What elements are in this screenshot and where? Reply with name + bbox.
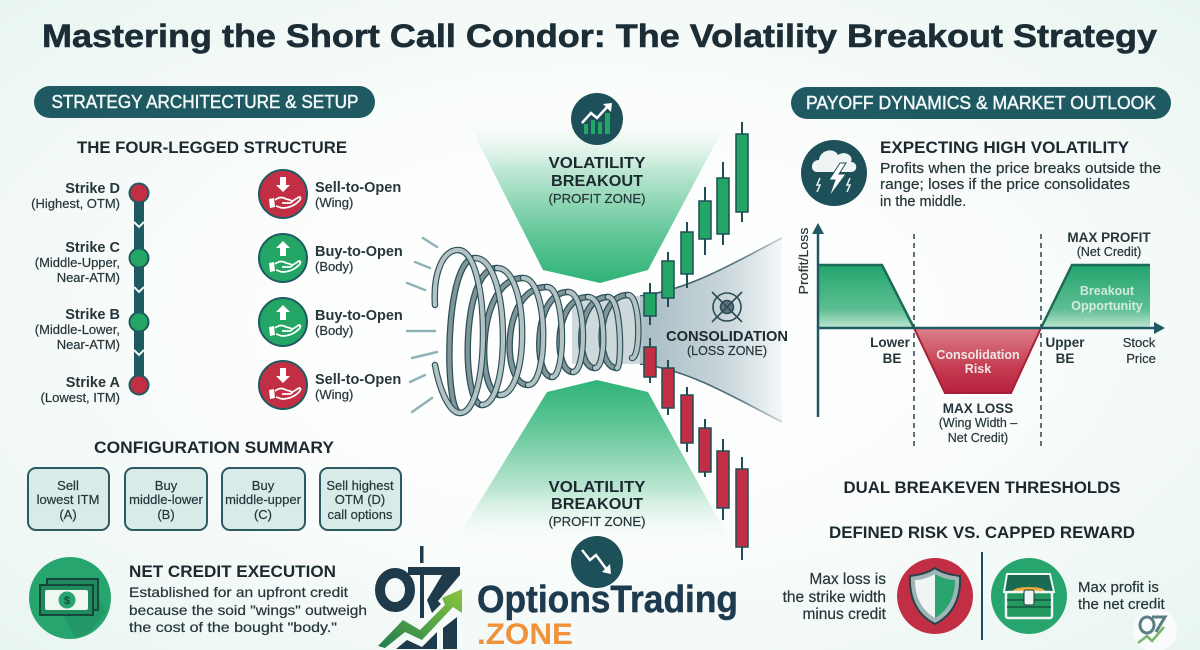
leg labels: (Body) [315,259,353,274]
net credit text: the cost of the bought "body." [129,619,337,635]
icon: buy body B [259,298,307,346]
upper profit funnel [462,110,733,283]
upper breakout label: VOLATILITY [548,155,646,172]
heading: configuration summary: CONFIGURATION SUMMARY [94,438,335,457]
strike labels: (Middle-Lower, [35,322,120,337]
icon: sell wing A [259,361,307,409]
max profit text [1078,579,1166,613]
max profit text: the net credit [1078,596,1166,613]
lower breakout label: (PROFIT ZONE) [548,514,646,529]
payoff chart: Profit/Loss [796,227,811,294]
payoff chart: MAX PROFIT [1067,230,1151,245]
brand logo [378,546,738,650]
volatility text: in the middle. [880,194,966,210]
heading: defined risk: DEFINED RISK VS. CAPPED REWARD [829,524,1135,542]
leg labels: (Wing) [315,195,353,210]
summary box C: (C) [254,507,272,522]
max loss text: the strike width [783,589,886,606]
payoff chart: Risk [965,362,991,376]
green candlesticks [644,122,748,325]
payoff chart: Opportunity [1071,299,1143,313]
watermark logo [1133,608,1177,650]
icon: money: $ [64,595,70,607]
max loss text [783,571,887,623]
heading: dual breakeven: DUAL BREAKEVEN THRESHOLDS [844,479,1120,497]
icon: rising chart [571,93,623,145]
payoff chart: Consolidation [936,348,1020,362]
consolidation loss zone [572,238,782,422]
strike labels: Near-ATM) [57,270,120,285]
icon: consolidation target [712,292,742,322]
net credit text: NET CREDIT EXECUTION [129,562,336,581]
payoff chart: Upper [1045,335,1085,350]
max profit text: Max profit is [1078,579,1159,596]
upper breakout label: (PROFIT ZONE) [548,191,646,206]
strike labels: (Lowest, ITM) [41,390,120,405]
summary box D: call options [327,507,393,522]
summary box A: lowest ITM [37,492,99,507]
consolidation label [666,328,788,358]
leg labels: Sell-to-Open [315,180,401,196]
section heading: payoff dynamics [791,87,1171,119]
icon: treasure chest [991,558,1067,634]
summary box A: (A) [59,507,77,522]
leg labels: (Body) [315,323,353,338]
volatility text: EXPECTING HIGH VOLATILITY [880,138,1130,157]
net credit text: because the soid "wings" outweigh [129,602,367,618]
summary box B: Buy [155,478,178,493]
lower breakout label: VOLATILITY [548,479,646,496]
section heading: strategy architecture [34,86,375,118]
summary box B: middle-lower [129,492,204,507]
payoff chart: Stock [1123,335,1156,350]
leg labels [315,180,403,402]
logo mark [378,546,462,649]
logo wordmark: OptionsTrading [477,579,738,621]
strike labels: Strike B [65,307,120,323]
summary box B: (B) [157,507,175,522]
payoff chart: MAX LOSS [943,401,1013,416]
lower breakout label [548,479,646,529]
payoff chart: Net Credit) [948,431,1008,445]
icon: storm cloud [801,140,867,206]
panel: central volatility diagram [407,93,788,588]
consolidation label: (LOSS ZONE) [687,343,767,358]
summary box A: Sell [57,478,79,493]
upper breakout label [548,155,646,206]
strike labels: Near-ATM) [57,337,120,352]
payoff chart: Lower [870,335,911,350]
summary box A [28,468,109,530]
leg labels: Buy-to-Open [315,308,403,324]
summary box B [125,468,207,530]
net credit text [129,562,367,635]
payoff chart: Price [1126,351,1156,366]
red candlesticks [644,338,748,560]
upper breakout label: BREAKOUT [551,173,643,190]
icon: falling chart [571,536,623,588]
payoff chart: BE [883,351,901,366]
summary box D: Sell highest [326,478,394,493]
icon: buy body C [259,234,307,282]
consolidation label: CONSOLIDATION [666,328,788,345]
icon: sell wing D [259,170,307,218]
lower breakout label: BREAKOUT [551,496,643,513]
strike labels: Strike C [65,240,121,256]
summary box D: OTM (D) [335,492,385,507]
strike ladder [130,184,148,394]
strike labels [31,181,121,405]
strike labels: (Middle-Upper, [35,255,120,270]
summary box C [222,468,305,530]
volatility text: range; loses if the price consolidates [880,177,1130,193]
section heading: strategy architecture: STRATEGY ARCHITECTURE & SETUP [52,92,358,112]
spring motion lines [407,238,437,412]
volatility text: Profits when the price breaks outside the [880,161,1161,177]
summary box C: Buy [252,478,275,493]
title: Mastering the Short Call Condor: The Volatility Breakout Strategy [42,18,1157,54]
leg labels: (Wing) [315,387,353,402]
payoff chart: BE [1056,351,1074,366]
max loss text: Max loss is [809,571,886,588]
divider [981,552,983,640]
panel: strategy architecture and setup [28,86,403,639]
summary box C: middle-upper [225,492,302,507]
payoff chart [796,223,1165,447]
strike labels: Strike A [66,375,121,391]
leg labels: Sell-to-Open [315,372,401,388]
volatility text [880,138,1161,210]
summary box D [320,468,401,530]
payoff chart: (Net Credit) [1077,245,1141,259]
strike labels: (Highest, OTM) [31,196,120,211]
lower profit funnel [450,380,735,550]
icon: shield [897,558,973,634]
max loss text: minus credit [802,606,887,623]
icon: money [29,557,111,639]
section heading: payoff dynamics: PAYOFF DYNAMICS & MARKET OUTLOOK [806,93,1156,113]
payoff chart: (Wing Width – [939,416,1017,430]
payoff chart: Breakout [1080,284,1135,298]
leg labels: Buy-to-Open [315,244,403,260]
panel: payoff dynamics and market outlook [783,87,1177,650]
heading: four-legged structure: THE FOUR-LEGGED STRUCTURE [77,138,347,157]
compressed spring [435,250,638,413]
strike labels: Strike D [65,181,120,197]
net credit text: Established for an upfront credit [129,584,348,600]
